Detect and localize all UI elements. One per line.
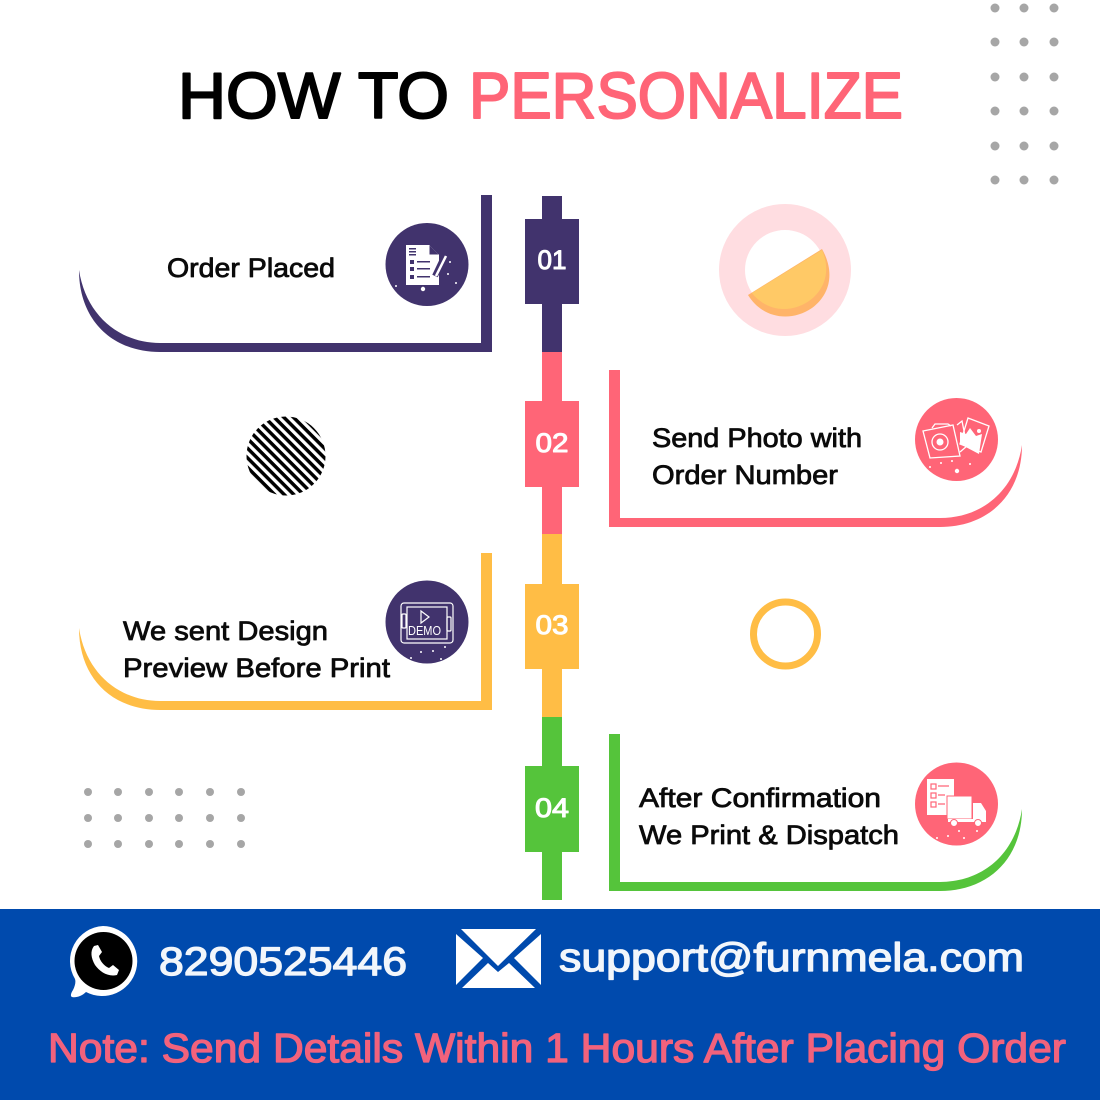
dot grid: bottom left [84, 788, 245, 848]
text: email: support@furnmela.com [559, 936, 1024, 980]
text: send photo with order number: Order Number [652, 460, 838, 490]
dot grid: top right [990, 4, 1058, 184]
step marker 04 [525, 717, 579, 900]
panel: step 4 print and dispatch [609, 734, 1022, 891]
icon: demo tablet [386, 580, 468, 664]
text: order placed: Order Placed [167, 253, 335, 283]
bracket 3 [79, 553, 492, 710]
step marker 03 [525, 534, 579, 717]
bracket 1 [79, 195, 492, 352]
step marker 01 [525, 196, 579, 352]
panel: step 1 order placed [79, 195, 492, 352]
icon: whatsapp phone [70, 926, 137, 997]
text: send photo with order number [652, 423, 862, 490]
text: print and dispatch: After Confirmation [639, 783, 881, 813]
text: send photo with order number: Send Photo with [652, 423, 862, 453]
icon: demo tablet: DEMO [408, 623, 441, 638]
icon: checklist and truck [915, 762, 998, 846]
text: phone number: 8290525446 [159, 940, 407, 984]
panel: contact banner [0, 909, 1100, 1100]
title: PERSONALIZE [469, 59, 903, 132]
panel: step 3 design preview [79, 553, 492, 710]
icon: order form [386, 223, 468, 306]
title [178, 59, 903, 132]
panel: step 2 send photo [609, 370, 1022, 527]
step marker 04: 04 [535, 793, 569, 823]
decoration: yellow ring [754, 602, 818, 666]
icon: envelope [456, 929, 541, 988]
title: HOW TO [178, 59, 449, 132]
bracket 4 [609, 734, 1022, 891]
text: print and dispatch [639, 783, 899, 850]
step marker 02 [525, 352, 579, 534]
text: design preview [123, 616, 391, 683]
step marker 02: 02 [536, 428, 568, 458]
text: print and dispatch: We Print & Dispatch [639, 820, 899, 850]
text: design preview: We sent Design [123, 616, 328, 646]
step marker 03: 03 [536, 610, 568, 640]
central timeline spine [525, 196, 579, 900]
step marker 01: 01 [538, 245, 566, 275]
text: design preview: Preview Before Print [123, 653, 391, 683]
icon: camera and photos [915, 398, 998, 481]
decoration: striped circle [246, 416, 326, 496]
text: note: Note: Send Details Within 1 Hours After Placing Order [48, 1025, 1066, 1071]
bracket 2 [609, 370, 1022, 527]
decoration: pink ring with half disc [732, 217, 838, 323]
